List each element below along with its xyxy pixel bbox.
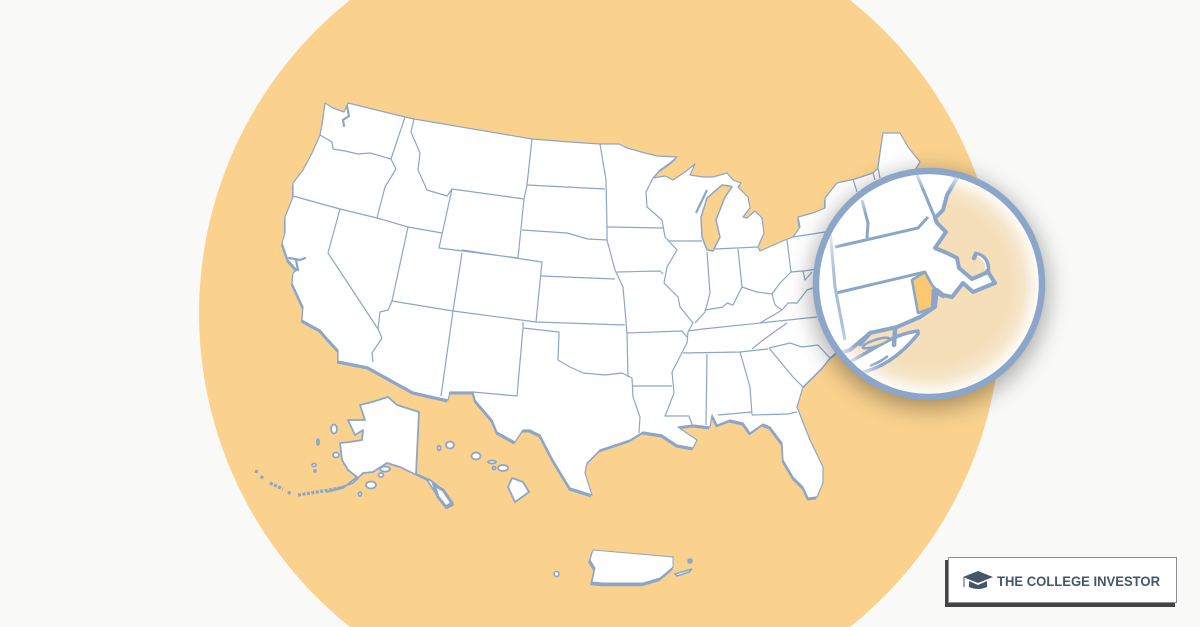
aleutian islands bbox=[255, 471, 340, 495]
long island sound bbox=[861, 336, 890, 350]
US map bbox=[281, 103, 930, 500]
badge box bbox=[948, 558, 1176, 602]
magnifier shadow bbox=[811, 172, 1047, 408]
logo text: THE COLLEGE INVESTOR bbox=[997, 573, 1160, 589]
new york border bbox=[830, 230, 845, 340]
cape cod hook bbox=[974, 254, 988, 272]
lens ring bbox=[816, 171, 1042, 397]
lens background bbox=[816, 171, 1042, 397]
puget sound and bay area inlets bbox=[289, 106, 349, 270]
new england land bbox=[820, 174, 998, 354]
narragansett bay bbox=[932, 288, 935, 302]
background circle bbox=[199, 0, 1001, 627]
rhode island bbox=[912, 272, 943, 313]
long island bbox=[850, 331, 918, 373]
south shore strip bbox=[870, 356, 888, 366]
lens state borders bbox=[835, 175, 935, 293]
alaska bbox=[255, 397, 453, 508]
lens rim fade bbox=[816, 171, 1042, 397]
badge shadow bbox=[945, 560, 1175, 607]
bering sea and gulf islands bbox=[312, 424, 452, 507]
puerto rico bbox=[554, 550, 693, 586]
map: contiguous states outline bbox=[281, 103, 930, 500]
lake michigan bbox=[701, 185, 732, 251]
magnifier lens with New England close-up bbox=[800, 150, 1042, 397]
graduation cap icon bbox=[963, 571, 993, 589]
state borders bbox=[293, 117, 880, 433]
green bay bbox=[696, 190, 707, 213]
logo badge bbox=[945, 558, 1176, 607]
hawaii bbox=[438, 442, 529, 502]
shoreline blobs bbox=[860, 330, 895, 345]
